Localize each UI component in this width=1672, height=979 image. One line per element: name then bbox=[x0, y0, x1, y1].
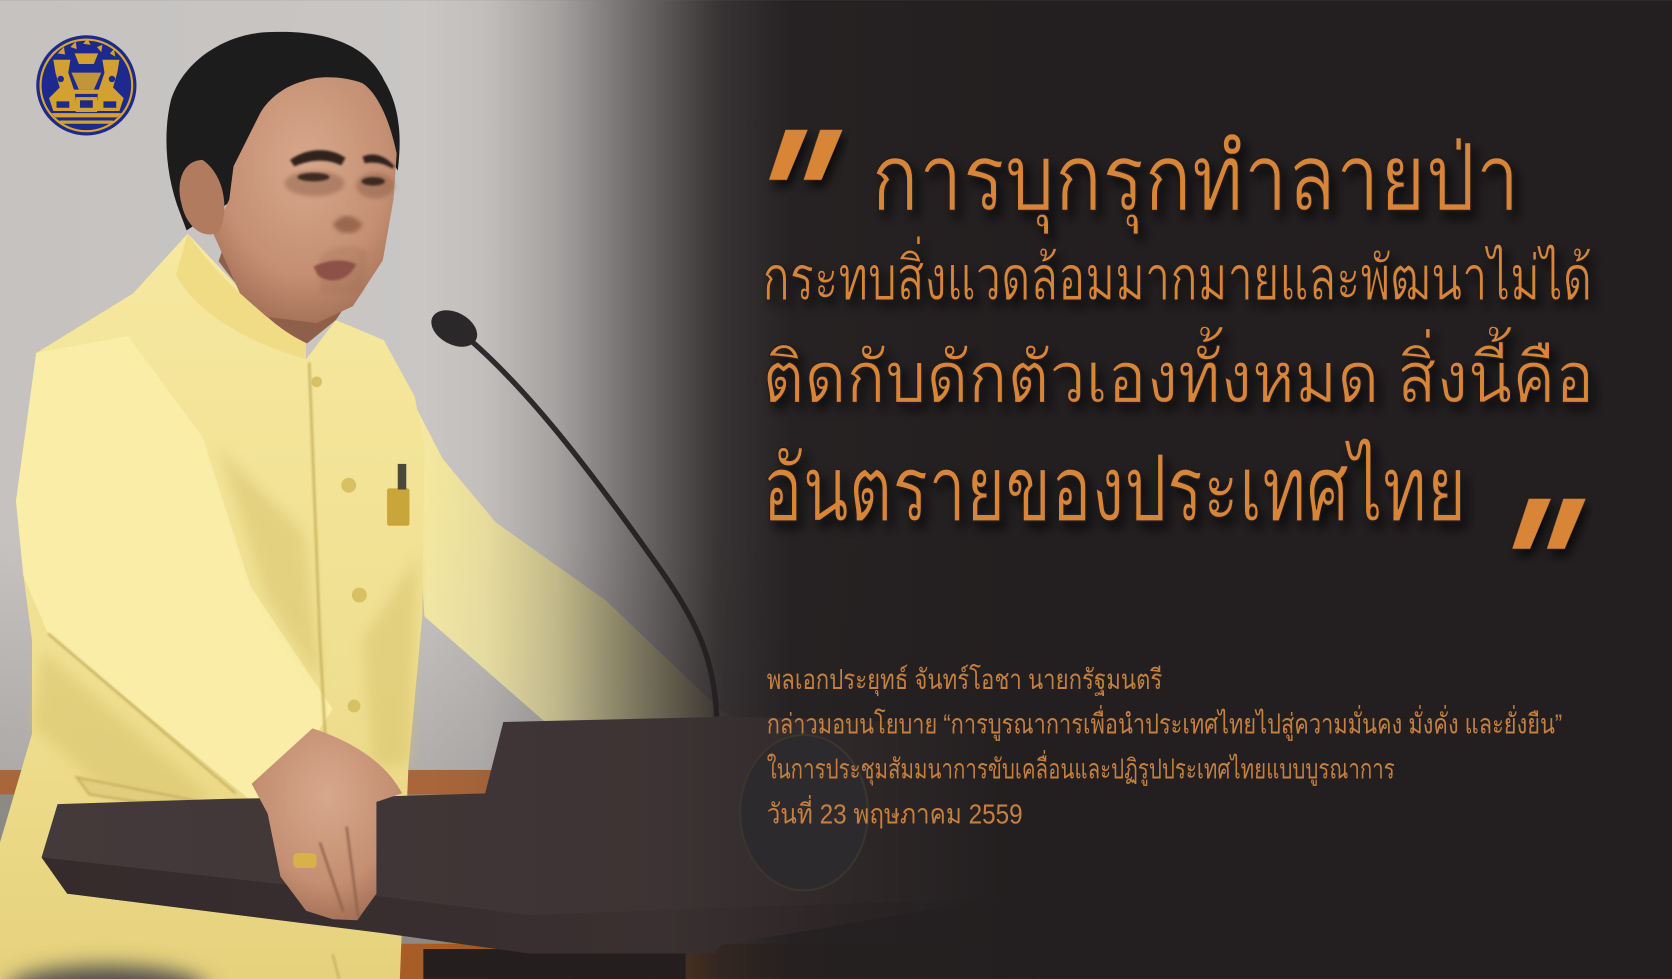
jacket shading folds bbox=[32, 448, 418, 810]
seal centre emblem bbox=[49, 38, 124, 124]
microphone bbox=[425, 303, 717, 717]
podium bbox=[42, 717, 1002, 979]
podium lower ledge bbox=[42, 857, 1002, 953]
headline line 3: ติดกับดักตัวเองทั้งหมด สิ่งนี้คือ bbox=[762, 326, 1594, 418]
man in yellow suit bbox=[0, 32, 736, 979]
attribution venue: ในการประชุมสัมมนาการขับเคลื่อนและปฏิรูปประเทศไทยแบบบูรณาการ bbox=[767, 749, 1395, 786]
headline line 1: การบุกรุกทำลายป่า bbox=[871, 125, 1520, 235]
hair bbox=[166, 32, 400, 230]
badge on pocket bbox=[387, 464, 409, 526]
opening quotation mark: " bbox=[724, 86, 853, 310]
face bbox=[213, 77, 397, 323]
podium seal bbox=[740, 735, 868, 890]
hand on podium bbox=[252, 728, 402, 920]
ring bbox=[293, 853, 317, 868]
mouth bbox=[314, 260, 356, 280]
base bbox=[51, 113, 122, 117]
closing quotation mark: " bbox=[1467, 455, 1596, 679]
facial features bbox=[285, 150, 395, 293]
altar bbox=[66, 90, 107, 94]
jacket body bbox=[0, 234, 424, 979]
jacket buttons bbox=[311, 376, 367, 712]
podium body bbox=[42, 717, 1002, 953]
flames at top bbox=[58, 38, 115, 57]
eye socket shading bbox=[285, 171, 395, 293]
attribution name: พลเอกประยุทธ์ จันทร์โอชา นายกรัฐมนตรี bbox=[767, 664, 1162, 697]
right forearm bbox=[411, 397, 736, 721]
podium stem bbox=[423, 949, 686, 979]
left lion bbox=[49, 60, 77, 111]
right lion bbox=[96, 60, 124, 111]
collar bbox=[176, 234, 306, 359]
attribution text block bbox=[767, 664, 1562, 829]
foreground blurred head bbox=[5, 966, 208, 979]
dark fade overlay bbox=[427, 0, 1013, 979]
eyebrows bbox=[290, 150, 395, 169]
government seal logo bbox=[36, 35, 136, 135]
neck bbox=[219, 245, 357, 343]
nose bbox=[333, 216, 363, 233]
headline quote bbox=[762, 125, 1594, 540]
sleeve seam, placket and pocket bbox=[48, 363, 339, 979]
eyes bbox=[298, 173, 385, 186]
left sleeve bbox=[16, 336, 333, 808]
ear bbox=[180, 160, 224, 235]
seal blue details bbox=[57, 76, 116, 108]
finger lines bbox=[320, 826, 358, 917]
attribution date: วันที่ 23 พฤษภาคม 2559 bbox=[767, 794, 1023, 829]
central bowl bbox=[75, 53, 98, 64]
